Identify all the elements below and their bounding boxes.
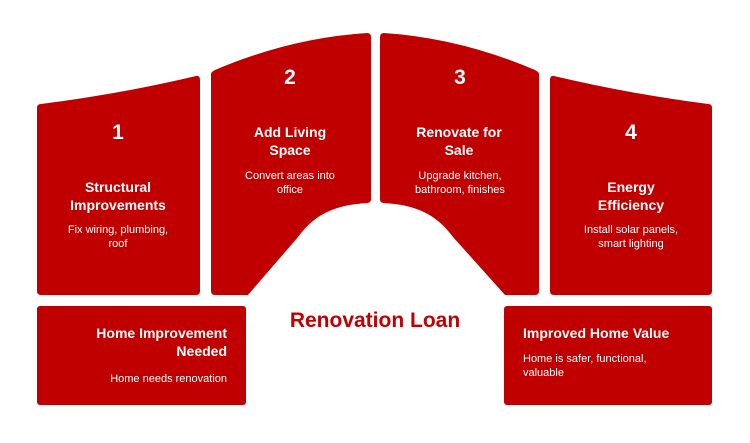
panel: structural improvements xyxy=(37,76,200,295)
panel: renovate for sale: Renovate for xyxy=(416,124,502,140)
panel: structural improvements: 1 xyxy=(112,121,124,144)
panel: structural improvements: Fix wiring, plumbing, xyxy=(68,224,168,236)
panel: renovate for sale: bathroom, finishes xyxy=(415,184,505,196)
panel: renovate for sale: Sale xyxy=(445,142,474,158)
panel: improved home value: Improved Home Value xyxy=(523,325,669,341)
panel: energy efficiency xyxy=(550,76,712,295)
panel: structural improvements: roof xyxy=(109,238,128,250)
panel: home improvement needed: Needed xyxy=(176,343,227,359)
panel: add living space: Space xyxy=(269,142,311,158)
panel: home improvement needed: Home needs renovation xyxy=(110,373,227,385)
panel: energy efficiency: Efficiency xyxy=(598,197,664,213)
title: Renovation Loan xyxy=(290,309,460,332)
panel: improved home value: valuable xyxy=(523,367,564,379)
panel: energy efficiency: Energy xyxy=(607,179,655,195)
panel: renovate for sale: 3 xyxy=(454,66,466,89)
panel: structural improvements: Improvements xyxy=(70,197,166,213)
panel: energy efficiency: smart lighting xyxy=(598,238,664,250)
panel: renovate for sale xyxy=(380,33,539,295)
panel: improved home value: Home is safer, functional, xyxy=(523,353,647,365)
panel: renovate for sale: Upgrade kitchen, xyxy=(418,170,502,182)
panel: add living space: Convert areas into xyxy=(245,170,335,182)
panel: improved home value xyxy=(504,306,712,405)
panel: add living space: office xyxy=(277,184,303,196)
panel: add living space: 2 xyxy=(284,66,296,89)
panel: home improvement needed xyxy=(37,306,246,405)
panel: energy efficiency: Install solar panels, xyxy=(584,224,678,236)
panel: add living space: Add Living xyxy=(254,124,326,140)
panel: structural improvements: Structural xyxy=(85,179,151,195)
panel: home improvement needed: Home Improvement xyxy=(96,325,227,341)
panel: add living space xyxy=(211,33,371,295)
panel: energy efficiency: 4 xyxy=(625,121,637,144)
